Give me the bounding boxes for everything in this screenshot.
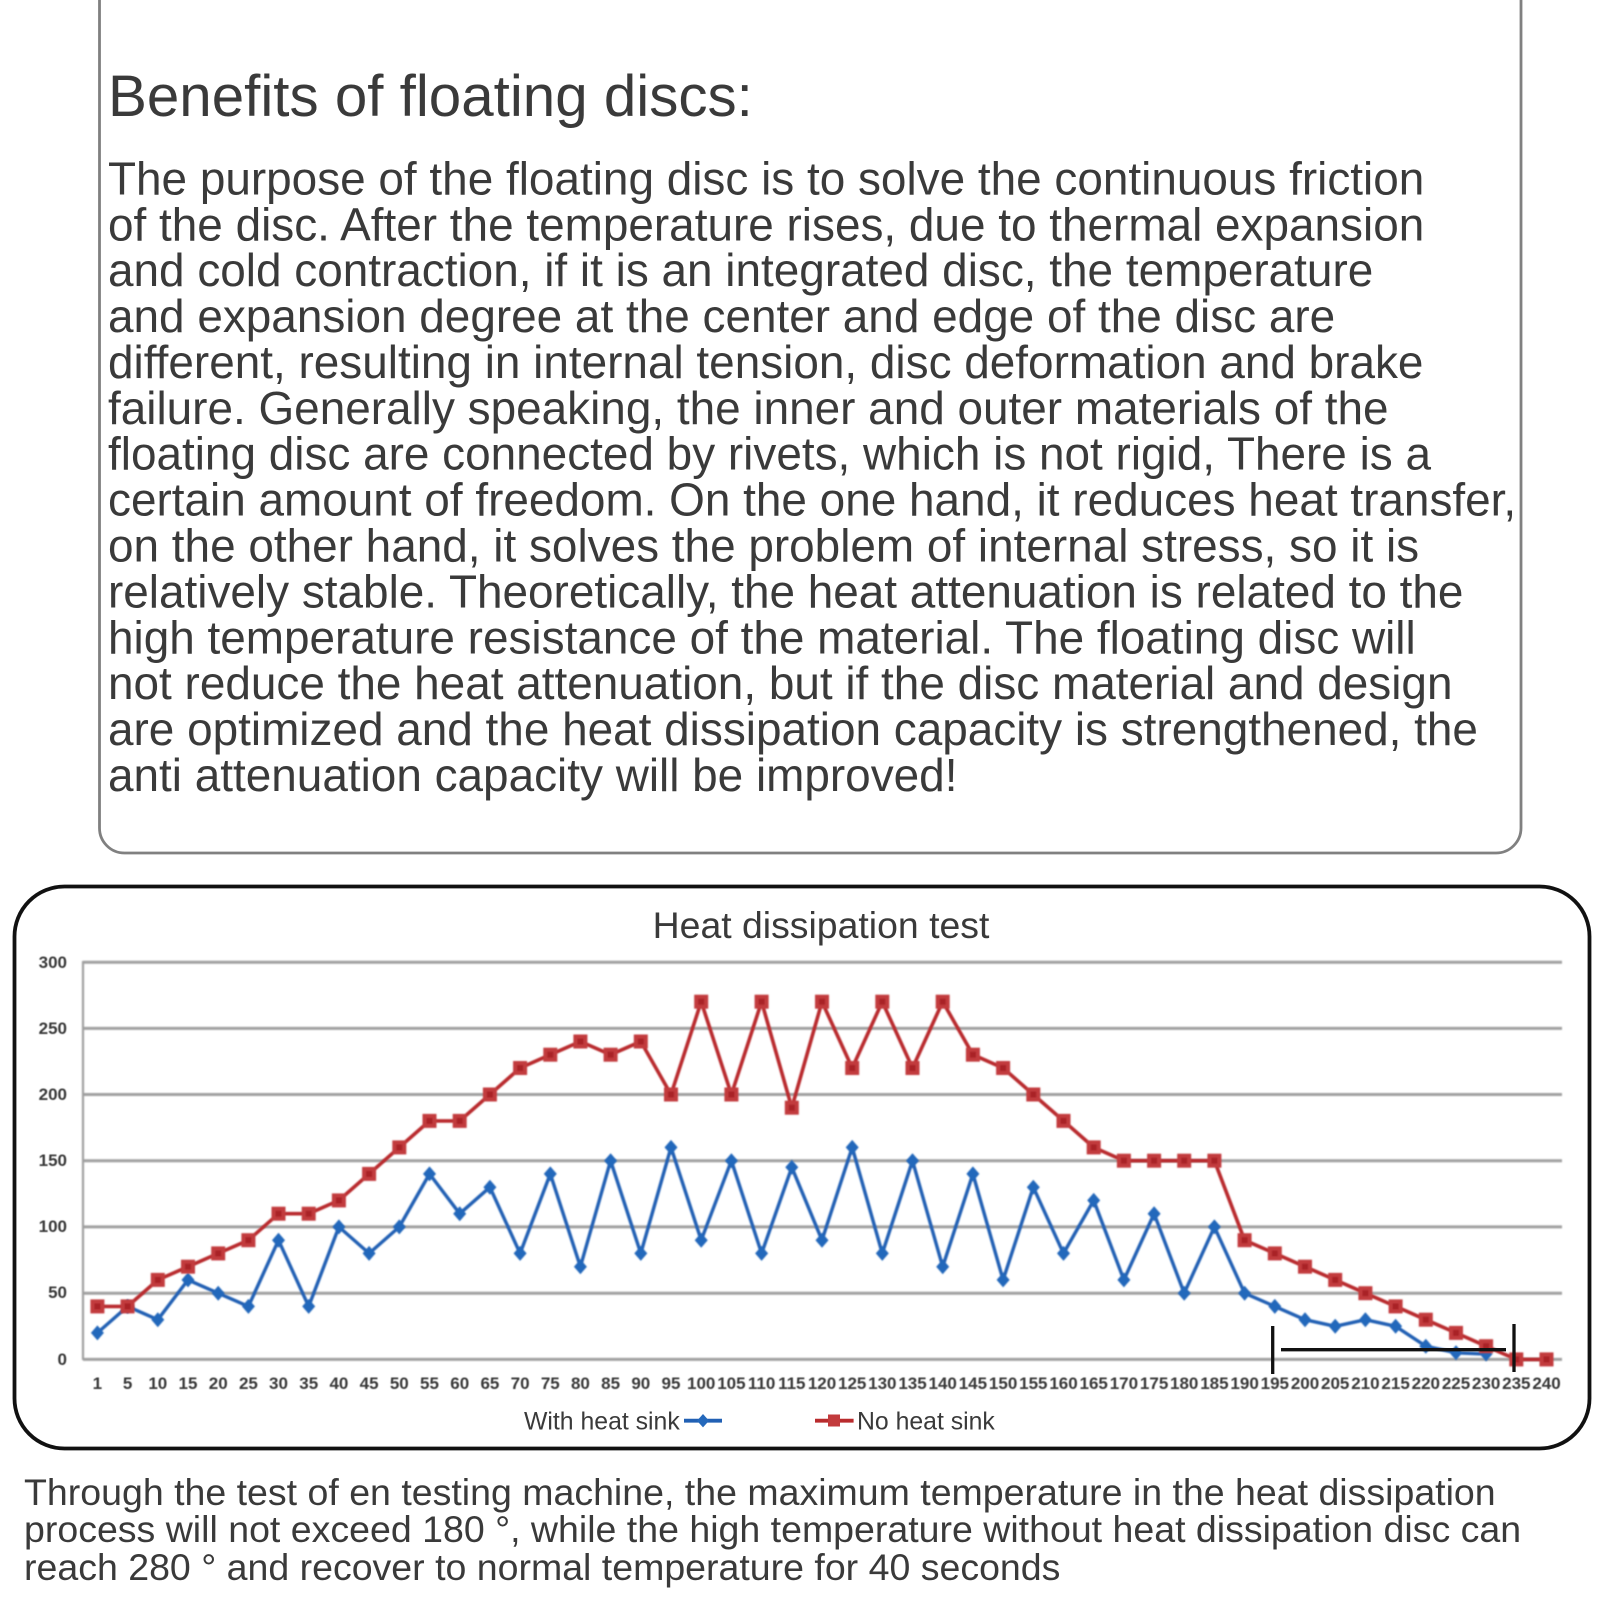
x axis labels: 75 xyxy=(541,1374,560,1393)
y axis labels xyxy=(39,953,67,1369)
x axis labels: 40 xyxy=(329,1374,348,1393)
x axis labels: 135 xyxy=(898,1374,927,1393)
x axis labels: 235 xyxy=(1502,1374,1530,1393)
x axis labels: 25 xyxy=(239,1374,258,1393)
y axis labels: 100 xyxy=(39,1217,67,1236)
y axis labels: 150 xyxy=(39,1151,67,1170)
y axis labels: 250 xyxy=(39,1019,67,1038)
x axis labels: 230 xyxy=(1472,1374,1500,1393)
text block: benefits explanation: and expansion degree at the center and edge of the disc are xyxy=(108,290,1335,342)
x axis labels: 70 xyxy=(511,1374,530,1393)
x axis labels: 65 xyxy=(480,1374,499,1393)
x axis labels: 160 xyxy=(1049,1374,1078,1393)
x axis labels: 110 xyxy=(748,1374,775,1393)
x axis labels: 140 xyxy=(929,1374,957,1393)
text block: benefits explanation: are optimized and the heat dissipation capacity is strengthened, the xyxy=(108,703,1478,755)
x axis labels: 120 xyxy=(808,1374,836,1393)
y axis labels: 200 xyxy=(39,1085,67,1104)
text block: benefits explanation: not reduce the heat attenuation, but if the disc material and design xyxy=(108,657,1452,709)
x axis labels: 205 xyxy=(1321,1374,1349,1393)
y axis labels: 300 xyxy=(39,953,67,972)
x axis labels: 15 xyxy=(179,1374,197,1393)
x axis labels: 105 xyxy=(717,1374,746,1393)
x axis labels: 20 xyxy=(209,1374,228,1393)
x axis labels: 100 xyxy=(687,1374,715,1393)
x axis labels: 180 xyxy=(1170,1374,1198,1393)
caption: test result explanation: Through the test of en testing machine, the maximum temperature in the heat dissipation xyxy=(24,1471,1496,1513)
x axis labels: 85 xyxy=(601,1374,620,1393)
x axis labels: 10 xyxy=(148,1374,167,1393)
x axis labels: 195 xyxy=(1261,1374,1289,1393)
text block: benefits explanation: high temperature resistance of the material. The floating disc will xyxy=(108,611,1416,663)
text block: benefits explanation: and cold contraction, if it is an integrated disc, the temperature xyxy=(108,244,1373,296)
caption: test result explanation: reach 280 ° and recover to normal temperature for 40 seconds xyxy=(24,1546,1060,1588)
legend: no heat sink: No heat sink xyxy=(857,1408,995,1436)
x axis labels: 240 xyxy=(1532,1374,1561,1393)
x axis labels: 210 xyxy=(1351,1374,1380,1393)
x axis labels: 50 xyxy=(390,1374,409,1393)
legend: with heat sink: With heat sink xyxy=(524,1408,680,1436)
x axis labels: 190 xyxy=(1230,1374,1259,1393)
x axis labels: 95 xyxy=(662,1374,680,1393)
panel: benefits text box xyxy=(100,0,1529,853)
x axis labels: 165 xyxy=(1080,1374,1108,1393)
caption: test result explanation: process will not exceed 180 °, while the high temperature without heat dissipation disc can xyxy=(24,1508,1521,1550)
x axis labels: 90 xyxy=(631,1374,650,1393)
text block: benefits explanation: different, resulting in internal tension, disc deformation and brake xyxy=(108,336,1423,388)
x axis labels: 125 xyxy=(838,1374,866,1393)
x axis labels: 185 xyxy=(1200,1374,1229,1393)
x axis labels: 150 xyxy=(989,1374,1017,1393)
text block: benefits explanation: failure. Generally speaking, the inner and outer materials of the xyxy=(108,382,1389,434)
x axis labels: 45 xyxy=(360,1374,379,1393)
text block: benefits explanation: anti attenuation capacity will be improved! xyxy=(108,749,957,801)
x axis labels: 170 xyxy=(1110,1374,1138,1393)
x axis labels: 80 xyxy=(571,1374,590,1393)
x axis labels: 215 xyxy=(1381,1374,1410,1393)
x axis labels: 35 xyxy=(299,1374,318,1393)
text block: benefits explanation: relatively stable. Theoretically, the heat attenuation is related to the xyxy=(108,565,1463,617)
x axis labels xyxy=(93,1374,1561,1393)
x axis labels: 30 xyxy=(269,1374,288,1393)
chart title: Heat dissipation test xyxy=(653,904,990,946)
x axis labels: 55 xyxy=(420,1374,439,1393)
text block: benefits explanation: on the other hand, it solves the problem of internal stress, so it is xyxy=(108,520,1419,572)
heading: benefits of floating discs: Benefits of floating discs: xyxy=(108,64,753,129)
x axis labels: 115 xyxy=(778,1374,806,1393)
y axis labels: 50 xyxy=(48,1283,67,1302)
gridlines xyxy=(83,961,1562,1360)
x axis labels: 60 xyxy=(450,1374,469,1393)
series: with heat sink (blue line) xyxy=(97,1147,1486,1354)
text block: benefits explanation: floating disc are connected by rivets, which is not rigid, There is a xyxy=(108,428,1431,480)
text block: benefits explanation: of the disc. After the temperature rises, due to thermal expansion xyxy=(108,198,1424,250)
series: no heat sink (red line) xyxy=(97,1002,1546,1359)
x axis labels: 225 xyxy=(1442,1374,1470,1393)
text block: benefits explanation: The purpose of the floating disc is to solve the continuous friction xyxy=(108,152,1424,204)
x axis labels: 130 xyxy=(868,1374,896,1393)
text block: benefits explanation: certain amount of freedom. On the one hand, it reduces heat transfer, xyxy=(108,474,1516,526)
x axis labels: 175 xyxy=(1140,1374,1168,1393)
x axis labels: 155 xyxy=(1019,1374,1047,1393)
x axis labels: 200 xyxy=(1291,1374,1319,1393)
x axis labels: 1 xyxy=(93,1374,102,1393)
x axis labels: 220 xyxy=(1412,1374,1440,1393)
y axis labels: 0 xyxy=(58,1350,67,1369)
panel: heat dissipation test chart xyxy=(14,886,1590,1448)
annotation: black bracket marking cooling interval xyxy=(1273,1324,1514,1374)
x axis labels: 5 xyxy=(123,1374,132,1393)
x axis labels: 145 xyxy=(959,1374,987,1393)
